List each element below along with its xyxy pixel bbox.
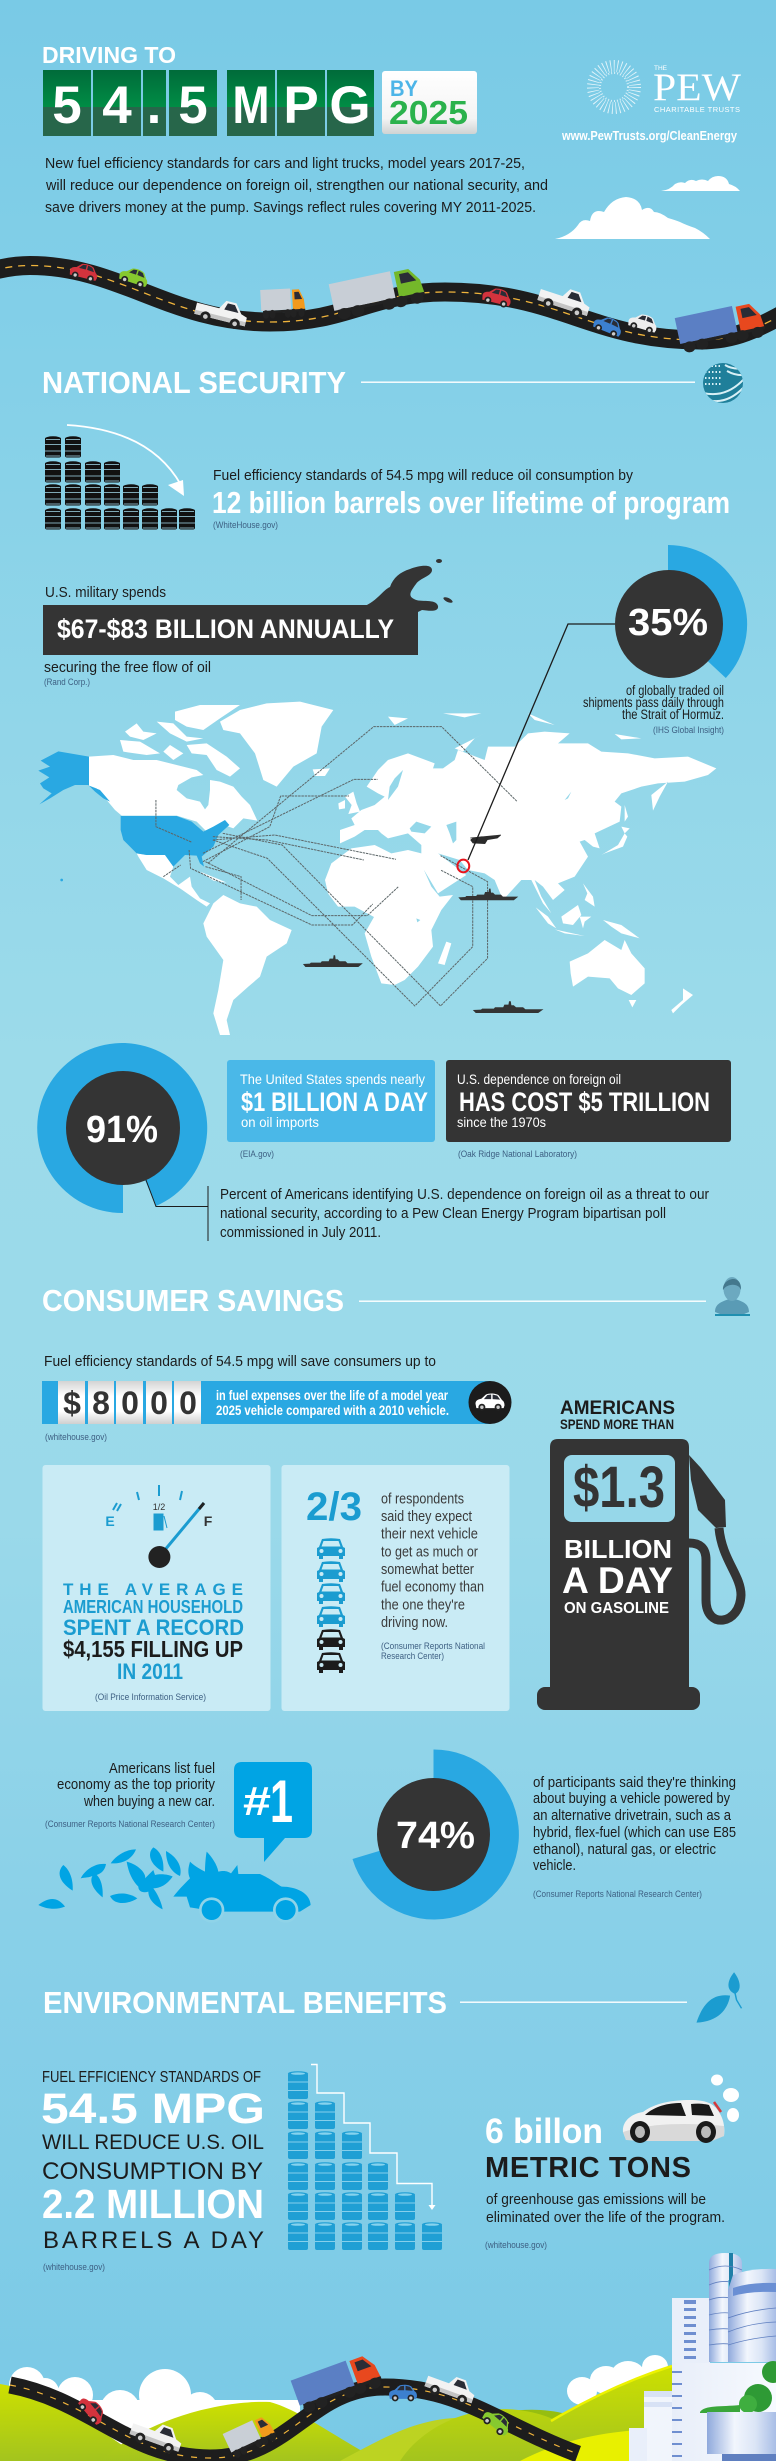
text: average household: SPENT A RECORD [63,1615,244,1640]
title: 54.5 MPG flip-counter: . [147,76,161,135]
heading: consumer savings [42,1277,750,1318]
arrow: stair-step down [311,2064,436,2210]
text: average household: THE AVERAGE [63,1580,243,1599]
savings banner: 2025 vehicle compared with a 2010 vehicle. [216,1402,449,1418]
footer landscape [0,2253,776,2461]
stat: number one priority: when buying a new car. [83,1793,215,1810]
icon: car with leaves [38,1847,311,1923]
intro paragraph [45,155,548,216]
counter digits: $ [63,1385,81,1421]
caption: shipments pass daily through [583,695,724,710]
title: 54.5 MPG flip-counter: 4 [102,76,132,135]
savings banner: in fuel expenses over the life of a model year [216,1387,448,1403]
icon: oil splash [365,559,453,612]
source: (IHS Global Insight) [653,725,724,735]
source: (Consumer Reports National [381,1641,485,1651]
icon: row of cars [317,1538,345,1673]
ring [668,545,747,678]
panel: five trillion cost: (Oak Ridge National Laboratory) [458,1149,577,1159]
world map [38,702,716,1035]
panel: two thirds of respondents: 2/3 [306,1485,362,1529]
text: expectation: driving now. [381,1614,448,1631]
icon: helicopter [470,835,501,844]
stat: number one priority [38,1760,312,1923]
panel: one billion a day: The United States spends nearly [240,1071,425,1087]
stat: 74 percent donut: 74% [396,1815,475,1857]
speech bubble: 1 [270,1768,293,1835]
vehicle: white car [627,311,659,335]
text: expectation: somewhat better [381,1561,474,1578]
infographic: gas pump: AMERICANS [560,1398,675,1419]
text: expectation: to get as much or [381,1543,478,1560]
stat: number one priority: economy as the top priority [57,1776,215,1793]
clouds [555,176,740,239]
panel: gauge and household spending [42,1465,270,1711]
caption: national security, according to a Pew Clean Energy Program bipartisan poll [220,1205,666,1222]
dark bar with amount [43,605,418,655]
panel: five trillion cost [446,1060,731,1159]
road [10,2385,578,2458]
logo: Pew Charitable Trusts: CHARITABLE TRUSTS [654,105,740,114]
icon: warship [303,955,363,967]
caption: vehicle. [533,1857,576,1874]
caption: about buying a vehicle powered by [533,1790,730,1807]
vehicle: green-cab semi truck [329,265,426,321]
icon: car [476,1393,504,1411]
icon: warship [458,889,518,900]
intro paragraph: will reduce our dependence on foreign oil, strengthen our national security, and [45,177,548,194]
logo: Pew Charitable Trusts [593,65,741,114]
dark disc [615,570,723,678]
callout: Strait of Hormuz ring [457,860,469,872]
text: expectation: fuel economy than [381,1579,484,1596]
vehicle: red car [68,261,100,284]
counter digits: 0 [179,1385,197,1421]
highlighted: USA and Alaska [38,751,229,867]
intro paragraph: New fuel efficiency standards for cars and light trucks, model years 2017-25, [45,155,525,172]
vehicle: white pickup [193,294,250,331]
source: (Oil Price Information Service) [95,1692,206,1702]
buildings [629,2253,776,2461]
title: 54.5 MPG flip-counter: 5 [178,76,208,135]
icon: person [715,1277,750,1316]
title: driving to: DRIVING TO [42,42,176,68]
text: expectation: the one they're [381,1596,465,1613]
stat: 8000 savings [42,1353,512,1442]
infographic: gas pump: ON GASOLINE [564,1600,669,1617]
counter digits: 8 [92,1385,110,1421]
title: 54.5 MPG flip-counter: P [283,76,319,135]
caption: hybrid, flex-fuel (which can use E85 [533,1824,736,1841]
source: (whitehouse.gov) [45,1432,107,1442]
vehicle: blue car [389,2385,417,2401]
stat: 6 billion metric tons: of greenhouse gas emissions will be [486,2191,706,2208]
land: Africa, Eurasia and Oceania [325,713,716,1013]
source: Research Center) [381,1651,444,1661]
vehicle: green car [480,2406,514,2439]
speech bubble [234,1762,312,1862]
text: expectation [381,1490,484,1631]
text: expectation: their next vehicle [381,1526,478,1543]
leader line [146,1180,208,1241]
caption [583,683,724,722]
vehicle: orange delivery truck [260,288,306,319]
caption: ethanol), natural gas, or electric [533,1841,716,1858]
caption: an alternative drivetrain, such as a [533,1807,732,1824]
ring [37,1043,207,1213]
text block: FUEL EFFICIENCY STANDARDS OF [42,2069,261,2086]
hills [0,2366,672,2461]
icon: fuel gauge: 1/2 [153,1502,165,1512]
text: average household: IN 2011 [117,1659,183,1684]
vehicle: green car [118,264,150,290]
heading: environmental benefits: ENVIRONMENTAL BENEFITS [43,1985,447,2020]
caption: Percent of Americans identifying U.S. dependence on foreign oil as a threat to our [220,1186,709,1203]
header block [42,42,741,216]
caption [220,1186,709,1241]
heading: national security: NATIONAL SECURITY [42,365,346,400]
caption: of participants said they're thinking [533,1774,736,1791]
panel: one billion a day: $1 BILLION A DAY [241,1087,428,1117]
stat: military spending: U.S. military spends [45,584,166,601]
panel: five trillion cost: since the 1970s [457,1114,546,1130]
pump body [537,1439,741,1710]
title: 54.5 MPG flip-counter [43,70,374,136]
stat: 12 billion barrels [45,425,730,530]
vehicle: blue semi truck [291,2351,384,2415]
counter digits: 0 [121,1385,139,1421]
source: (Rand Corp.) [44,677,90,687]
logo: Pew Charitable Trusts: PEW [653,66,741,109]
counter digits: 0 [150,1385,168,1421]
savings banner [42,1381,512,1424]
stat: 35 percent donut: 35% [628,602,708,644]
routes and ships [156,727,544,1013]
stat: 74 percent donut [352,1749,736,1919]
panel: one billion a day [227,1060,435,1159]
heading: consumer savings: CONSUMER SAVINGS [42,1283,344,1318]
panel: two thirds of respondents [282,1465,510,1711]
vehicle: white pickup [536,281,593,321]
caption: commissioned in July 2011. [220,1224,381,1241]
infographic: gas pump: $1.3 [573,1455,665,1520]
panel: one billion a day: on oil imports [241,1114,319,1130]
icon: stack of black barrels [45,436,195,530]
land: Americas and Greenland [38,702,716,1035]
stat: 8000 savings: Fuel efficiency standards of 54.5 mpg will save consumers up to [44,1353,436,1370]
text: average household [63,1580,244,1684]
title: 54.5 MPG flip-counter: 5 [52,76,82,135]
infographic: gas pump [537,1398,741,1710]
text block: 2.2 MILLION [42,2181,264,2227]
vehicle: red car [75,2393,108,2427]
dark bar with amount: $67-$83 BILLION ANNUALLY [57,614,394,644]
icon: fuel gauge: F [204,1513,213,1529]
dark disc [66,1071,180,1185]
inland seas [388,770,571,922]
vehicle: white pickup [128,2415,185,2457]
stat: 6 billion metric tons: METRIC TONS [485,2152,691,2184]
arrow: downward curve [67,425,184,496]
panel: five trillion cost: HAS COST $5 TRILLION [459,1087,710,1117]
stat: 6 billion metric tons: 6 billon [485,2112,603,2151]
caption: of globally traded oil [626,683,724,698]
stat: 6 billion metric tons: (whitehouse.gov) [485,2240,547,2250]
infographic: gas pump: SPEND MORE THAN [560,1416,674,1432]
text block [41,2069,265,2272]
icon: flag globe [703,363,743,403]
heading: national security [44,363,743,403]
icon: declining blue barrels [288,2071,442,2250]
icon: fuel gauge: E [105,1513,115,1529]
pump display [564,1455,675,1522]
title: 54.5 MPG flip-counter: G [329,76,371,135]
stat: 2.2 million barrels [41,2064,442,2272]
source [381,1641,485,1661]
logo: Pew Charitable Trusts: THE [654,65,668,72]
text block: WILL REDUCE U.S. OIL [42,2131,264,2154]
badge: by 2025: BY [390,76,418,101]
stat: 91 percent donut [37,1043,709,1241]
leader line [468,624,615,860]
icon: warship [473,1001,544,1013]
caption [533,1774,736,1874]
website url: www.PewTrusts.org/CleanEnergy [561,128,738,143]
road [0,266,776,340]
source: (Consumer Reports National Research Center) [533,1889,702,1899]
text: expectation: said they expect [381,1508,473,1525]
title: 54.5 MPG flip-counter: M [232,76,270,135]
stat: 6 billion metric tons: eliminated over the life of the program. [486,2209,725,2226]
stat: military spending [43,559,453,687]
text block: 54.5 MPG [41,2085,265,2133]
vehicle: orange delivery truck [223,2414,278,2460]
counter digits [58,1381,201,1424]
intro paragraph: save drivers money at the pump. Savings reflect rules covering MY 2011-2025. [45,199,536,216]
vehicle: blue semi truck [675,300,766,354]
badge: by 2025 [382,71,477,134]
text: average household: $4,155 FILLING UP [63,1636,243,1662]
vehicle: red car [481,285,513,309]
icon: fuel gauge [105,1485,213,1568]
stat: number one priority: Americans list fuel [109,1760,215,1777]
vehicle: blue car [591,313,625,339]
infographic: gas pump: BILLION [564,1534,672,1564]
rooftop garden [744,2384,772,2412]
stat: military spending: securing the free flow of oil [44,659,211,676]
clouds behind hills [0,2355,668,2445]
oil routes [156,727,517,1006]
caption: the Strait of Hormuz. [622,707,724,722]
stat: 91 percent donut: 91% [86,1109,158,1151]
panel: five trillion cost: U.S. dependence on foreign oil [457,1071,621,1087]
badge: by 2025: 2025 [389,94,468,131]
heading: environmental benefits [43,1972,742,2023]
text block: (whitehouse.gov) [43,2262,105,2272]
text: reduction statement: Fuel efficiency standards of 54.5 mpg will reduce oil consumption by [213,467,633,484]
text: average household: AMERICAN HOUSEHOLD [63,1597,243,1617]
text block: BARRELS A DAY [43,2227,264,2254]
source: (Consumer Reports National Research Center) [45,1819,215,1829]
icon: leaf [696,1972,742,2023]
infographic: gas pump: A DAY [562,1560,673,1601]
stat: 35 percent donut [468,545,747,860]
icon: car with exhaust [623,2074,739,2143]
stat: 6 billion metric tons [485,2074,739,2250]
panel: one billion a day: (EIA.gov) [240,1149,274,1159]
text: expectation: of respondents [381,1490,464,1508]
road with traffic [0,261,776,354]
speech bubble: # [243,1778,271,1824]
source: (WhiteHouse.gov) [213,520,278,530]
text block: CONSUMPTION BY [42,2158,263,2185]
vehicle: white pickup [423,2368,478,2408]
